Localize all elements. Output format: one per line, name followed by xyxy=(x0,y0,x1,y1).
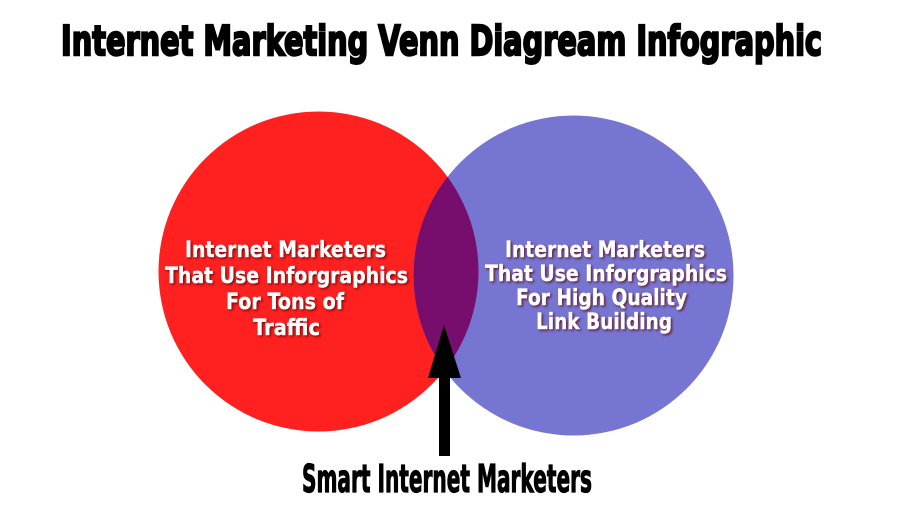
overlap: purple intersection xyxy=(414,177,478,370)
arrow pointing to overlap xyxy=(428,325,461,456)
bottom label: smart internet marketers: Smart Internet Marketers xyxy=(302,457,592,501)
text block: left circle label: For Tons of xyxy=(226,290,344,315)
text block: right circle label: Internet Marketers xyxy=(505,238,705,263)
circle: blue link building marketers xyxy=(414,116,734,436)
text block: left circle label: Internet Marketers xyxy=(185,238,386,263)
text block: left circle label xyxy=(165,238,408,341)
text block: left circle label: Traffic xyxy=(253,316,320,341)
text block: right circle label: That Use Inforgraphics xyxy=(485,262,727,287)
circle: red traffic marketers xyxy=(158,112,478,432)
text block: left circle label: That Use Inforgraphics xyxy=(165,264,408,289)
text block: right circle label xyxy=(485,238,727,335)
text block: right circle label: Link Building xyxy=(536,310,672,335)
venn diagram xyxy=(158,112,734,436)
text block: right circle label: For High Quality xyxy=(516,286,687,311)
